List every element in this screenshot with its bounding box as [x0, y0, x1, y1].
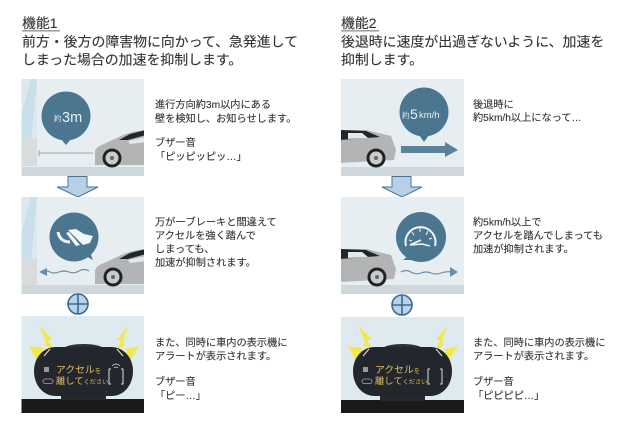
text: alert right: アラートが表示されます。: [473, 350, 594, 362]
panel: sudden acceleration: [22, 197, 146, 294]
text: acceleration suppressed: しまっても、: [155, 244, 214, 256]
panel: dashboard alert left: [22, 316, 144, 413]
callout: about 5km/h: km/h: [419, 110, 440, 121]
wavy arrow right: [401, 267, 458, 277]
arrow: down right: [382, 176, 422, 197]
text: alert left: アラートが表示されます。: [155, 350, 276, 362]
callout: about 5km/h: 5: [410, 106, 418, 122]
text: acceleration suppressed: 加速が抑制されます。: [155, 256, 256, 269]
text: wall detection: ブザー音: [155, 136, 196, 149]
callout: speedometer icon: [396, 212, 446, 262]
car: rear view: [339, 130, 396, 168]
heading: function 1: 機能1: [22, 15, 58, 31]
heading: function 2: [341, 15, 604, 68]
icon: warning bolts: [29, 325, 139, 361]
heading: function 1: [22, 15, 298, 68]
text: alert right: また、同時に車内の表示機に: [473, 336, 605, 349]
text: wall detection: 「ピッピッピッ…」: [155, 151, 247, 163]
text: reversing suppressed: [473, 216, 603, 256]
arrow: down left: [57, 176, 98, 197]
text: alert left: [155, 336, 287, 402]
text: wall detection: 壁を検知し、お知らせします。: [155, 112, 296, 125]
icon: plus left: [68, 294, 88, 314]
text: reversing suppressed: 加速が抑制されます。: [473, 242, 574, 256]
text: alert left: ブザー音: [155, 375, 196, 388]
text: alert left: また、同時に車内の表示機に: [155, 336, 287, 349]
text: acceleration suppressed: 万が一ブレーキと間違えて: [155, 216, 277, 228]
text: acceleration suppressed: アクセルを強く踏んで: [155, 229, 256, 242]
heading: function 1: 前方・後方の障害物に向かって、急発進して: [22, 34, 298, 50]
car: rear view: [339, 249, 396, 286]
text: alert right: ブザー音: [473, 375, 514, 388]
heading: function 2: 抑制します。: [341, 52, 423, 68]
display unit: アクセルを: [56, 364, 101, 376]
heading: function 2: 機能2: [341, 15, 377, 31]
text: reversing: [473, 98, 582, 124]
display unit: [353, 344, 452, 396]
display unit: アクセルを: [375, 364, 420, 376]
text: alert left: 「ピー…」: [155, 390, 206, 402]
text: wall detection: 進行方向約3m以内にある: [155, 98, 271, 111]
panel: dashboard alert right: [341, 317, 464, 413]
car: front view: [95, 249, 146, 286]
callout: about 3m: 約: [54, 113, 62, 123]
icon: plus right: [392, 295, 412, 315]
wavy arrow left: [39, 268, 89, 276]
text: alert right: 「ピピピピ…」: [473, 390, 544, 402]
callout: about 5km/h: [400, 88, 448, 142]
heading: function 2: 後退時に速度が出過ぎないように、加速を: [341, 34, 604, 50]
text: wall detection: [155, 98, 296, 163]
callout: pedal shoe icon: [50, 212, 98, 262]
display unit: 離してください: [375, 375, 427, 386]
text: reversing: 約5km/h以上になって…: [473, 111, 582, 124]
callout: about 3m: [42, 92, 90, 145]
text: alert right: [473, 336, 605, 402]
heading: function 1: しまった場合の加速を抑制します。: [22, 52, 242, 68]
display unit: [34, 344, 133, 396]
icon: warning bolts: [348, 325, 458, 361]
display unit: 離してください: [56, 375, 108, 386]
panel: reversing suppressed: [339, 197, 464, 294]
panel: reversing 5km/h: [339, 79, 464, 176]
text: reversing suppressed: 約5km/h以上で: [473, 216, 542, 228]
text: reversing suppressed: アクセルを踏んでしまっても: [473, 229, 603, 242]
arrow: reverse direction: [401, 142, 458, 157]
callout: about 5km/h: 約: [402, 110, 410, 120]
text: acceleration suppressed: [155, 216, 277, 269]
car: front view: [95, 130, 146, 168]
panel: wall detection 3m: [22, 79, 146, 176]
callout: about 3m: 3m: [62, 110, 82, 126]
text: reversing: 後退時に: [473, 98, 514, 111]
